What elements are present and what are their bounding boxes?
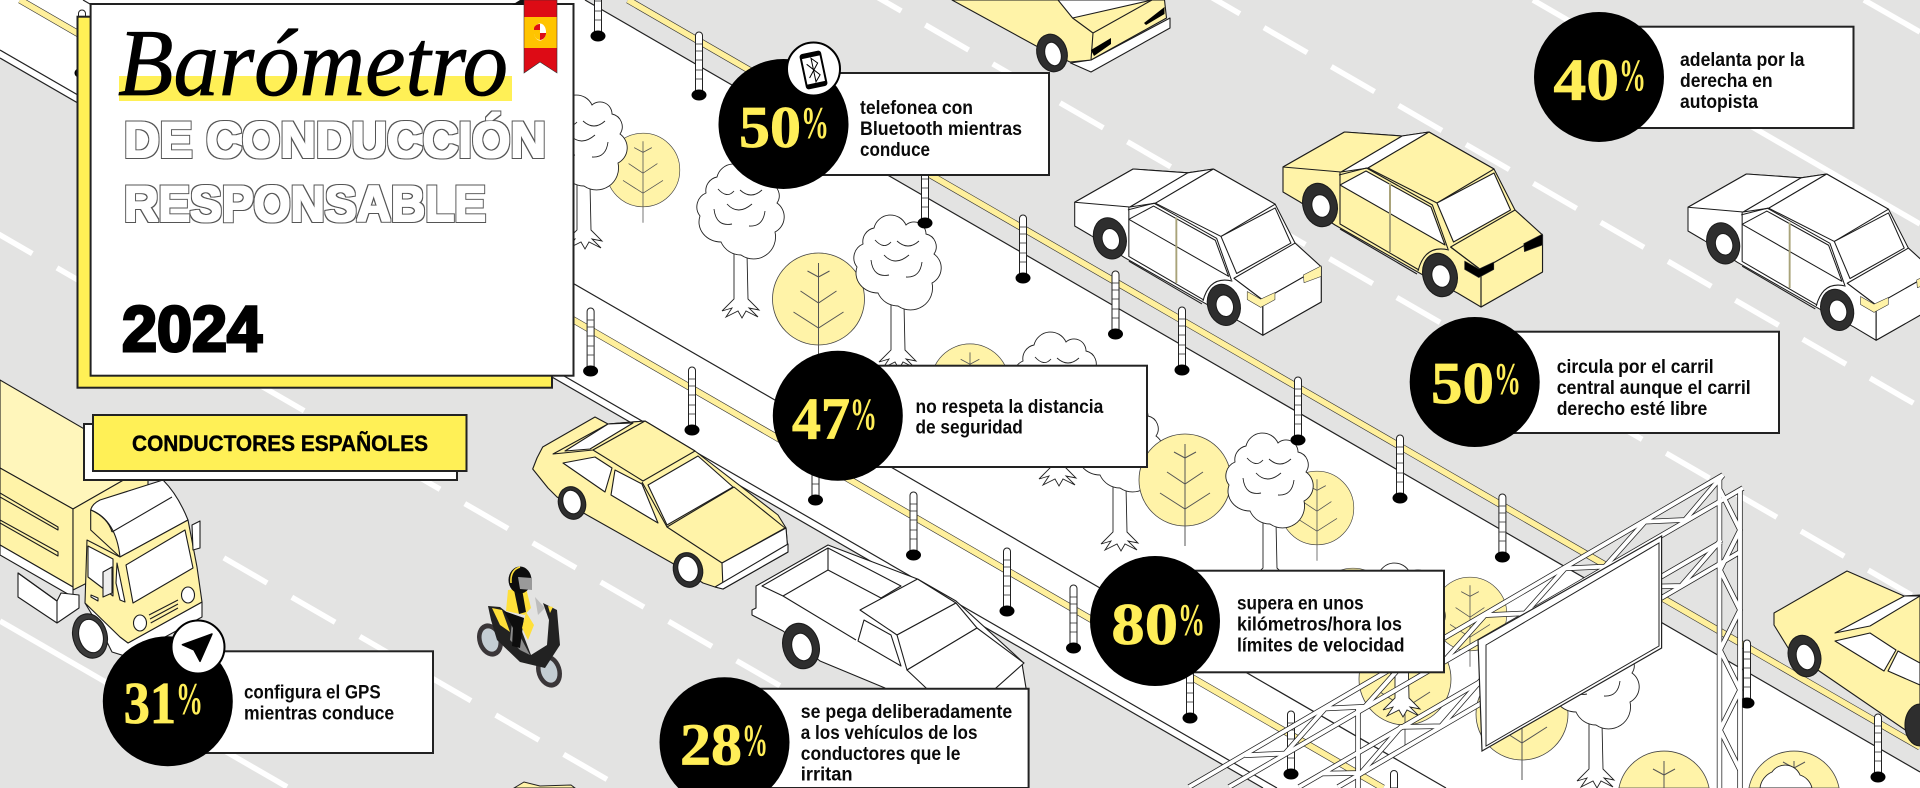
description: conduce: [860, 140, 930, 161]
percentage: 50: [739, 94, 801, 160]
description: a los vehículos de los: [801, 723, 978, 744]
icon: phone with Bluetooth: [787, 42, 840, 96]
title: Barómetro: Barómetro: [118, 10, 508, 116]
subtitle line 2: RESPONSABLE: [124, 176, 486, 232]
description: [1237, 594, 1404, 656]
text box: [725, 689, 1029, 788]
description: derecho esté libre: [1557, 399, 1707, 420]
callout: 31% configura el GPS: [103, 620, 433, 766]
description: se pega deliberadamente: [801, 702, 1012, 723]
description: configura el GPS: [244, 683, 381, 704]
title highlight: [119, 76, 512, 101]
year: 2024: [122, 293, 262, 365]
description: kilómetros/hora los: [1237, 615, 1402, 636]
description: autopista: [1680, 92, 1758, 113]
text box: [783, 73, 1049, 175]
description: telefonea con: [860, 98, 973, 119]
percentage: [792, 386, 877, 452]
road: lower carriageway: [0, 58, 1263, 788]
description: de seguridad: [916, 418, 1023, 439]
trees on the median: [540, 95, 1839, 788]
text box: [1475, 332, 1779, 433]
percentage: %: [850, 389, 877, 440]
label: CONDUCTORES ESPAÑOLES: CONDUCTORES ESPAÑOLES: [132, 431, 428, 456]
description: [860, 98, 1022, 161]
callout: 47% distancia de seguridad: [773, 351, 1147, 481]
percentage: 28: [680, 712, 742, 778]
callout: 80% supera los límites: [1090, 556, 1444, 686]
percentage: %: [742, 715, 768, 766]
car: white sedan, far right: [1688, 174, 1920, 340]
partial car at bottom edge: [514, 782, 575, 788]
percent circle: [1534, 12, 1664, 142]
description: adelanta por la: [1680, 50, 1805, 71]
description: conductores que le: [801, 744, 960, 765]
text box: [1155, 571, 1444, 672]
description: [244, 683, 394, 725]
description: derecha en: [1680, 71, 1773, 92]
description: [916, 397, 1104, 439]
car: yellow sedan at top: [952, 0, 1170, 75]
callout: 50% telefonea con Bluetooth: [718, 42, 1049, 189]
percentage: 50: [1431, 350, 1494, 416]
percentage: %: [801, 97, 829, 148]
percentage: %: [1619, 50, 1646, 100]
percentage: 40: [1554, 46, 1619, 112]
car: yellow hatchback, lower road: [533, 417, 788, 591]
percentage: [680, 712, 768, 778]
callout: 50% carril central: [1410, 317, 1779, 447]
description: circula por el carril: [1557, 357, 1714, 378]
percentage: [739, 94, 829, 160]
panel: title card: [78, 4, 574, 388]
description: supera en unos: [1237, 594, 1364, 615]
description: [801, 702, 1012, 786]
percentage: [1111, 591, 1205, 657]
motorcyclist: [473, 566, 566, 691]
percentage: [1554, 46, 1646, 112]
percentage: %: [1494, 353, 1521, 404]
description: mientras conduce: [244, 704, 394, 725]
description: [1680, 50, 1805, 113]
callout: 28% se pega deliberadamente: [660, 677, 1029, 788]
percentage: 80: [1111, 591, 1178, 657]
description: central aunque el carril: [1557, 378, 1751, 399]
percentage: 31: [124, 670, 176, 736]
text box: [168, 651, 433, 753]
text box: [838, 366, 1147, 467]
icon: navigation arrow: [172, 620, 224, 674]
percentage: %: [1178, 594, 1205, 645]
label: CONDUCTORES ESPAÑOLES: [84, 415, 466, 480]
callout: 40% adelanta por la derecha: [1534, 12, 1854, 142]
description: irritan: [801, 765, 853, 786]
car: yellow sedan, centre right: [1283, 132, 1542, 307]
gantry: blank billboard: [1478, 536, 1662, 751]
percent circle: [773, 351, 903, 481]
gantry: truss structure: [1189, 475, 1743, 788]
truck: [0, 380, 202, 662]
text box: [1599, 27, 1854, 128]
percent circle: [660, 677, 790, 788]
icon: Spanish flag ribbon: [512, 0, 557, 73]
car: white sedan, centre: [1075, 169, 1321, 335]
percent circle: [103, 636, 233, 766]
percent circle: [1090, 556, 1220, 686]
description: límites de velocidad: [1237, 635, 1404, 656]
car: yellow hatchback, lower right corner: [1774, 571, 1920, 746]
percentage: %: [176, 673, 203, 724]
road: upper carriageway: [585, 0, 1920, 772]
description: [1557, 357, 1751, 420]
percentage: [1431, 350, 1521, 416]
car: white pickup: [752, 545, 1026, 788]
description: no respeta la distancia: [916, 397, 1104, 418]
percent circle: [718, 59, 848, 189]
percentage: 47: [792, 386, 850, 452]
percent circle: [1410, 317, 1540, 447]
description: Bluetooth mientras: [860, 119, 1022, 140]
subtitle line 1: DE CONDUCCIÓN: [124, 112, 546, 168]
